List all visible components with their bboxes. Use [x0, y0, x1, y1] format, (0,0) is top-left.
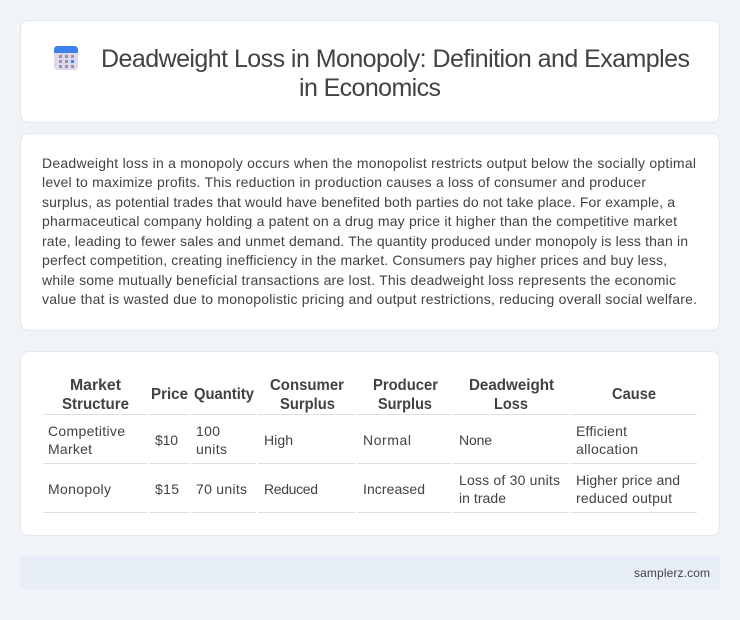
description panel: [20, 134, 720, 330]
row: competitive market: $10: [155, 432, 178, 448]
row: monopoly: Increased: [363, 481, 425, 497]
row: competitive market: High: [264, 432, 293, 448]
description text: value that is wasted due to monopolistic pricing and output restrictions, reducing overall social welfare.: [42, 291, 697, 307]
description text: level to maximize profits. This reduction in production causes a loss of consumer and producer: [42, 174, 646, 190]
description text: perfect competition, creating inefficiency in the market. Consumers pay higher prices and buy less,: [42, 252, 667, 268]
row: competitive market: None: [459, 432, 492, 448]
title: [101, 45, 690, 102]
row: competitive market: units: [196, 441, 227, 457]
table header: Structure: [62, 396, 129, 413]
footer bar: [20, 556, 720, 590]
footer text: samplerz.com: [634, 566, 710, 580]
row: monopoly: 70 units: [196, 481, 247, 497]
description text: rate, leading to fewer sales and unmet demand. The quantity produced under monopoly is less than in: [42, 233, 688, 249]
row: monopoly: Higher price and: [576, 472, 680, 488]
table header: Quantity: [194, 386, 254, 403]
title: Deadweight Loss in Monopoly: Definition and Examples: [101, 45, 690, 73]
table header: Cause: [612, 386, 656, 403]
description text: [41, 155, 697, 307]
row: competitive market: Competitive: [48, 423, 125, 439]
row: competitive market: Efficient: [576, 423, 627, 439]
description text: Deadweight loss in a monopoly occurs when the monopolist restricts output below the socially optimal: [42, 155, 696, 171]
row: monopoly: $15: [155, 481, 179, 497]
row: competitive market: allocation: [576, 441, 638, 457]
table header: Deadweight: [469, 377, 555, 394]
header panel: [20, 20, 720, 122]
table header: Price: [151, 386, 188, 403]
row: monopoly: in trade: [459, 490, 506, 506]
row: monopoly: [48, 472, 680, 506]
row: monopoly: Reduced: [264, 481, 318, 497]
title: in Economics: [299, 74, 441, 102]
table header: Market: [70, 377, 122, 394]
description text: pharmaceutical company holding a patent on a drug may price it higher than the competitive market: [42, 213, 677, 229]
icon: calendar: [54, 46, 78, 70]
row: monopoly: Loss of 30 units: [459, 472, 560, 488]
table header: Producer: [373, 377, 438, 394]
table header: Surplus: [378, 396, 432, 413]
row: competitive market: [48, 423, 638, 457]
description text: while some mutually beneficial transactions are lost. This deadweight loss represents the economic: [41, 272, 676, 288]
row: competitive market: Market: [48, 441, 92, 457]
table rules: [43, 414, 697, 512]
row: monopoly: reduced output: [576, 490, 672, 506]
table header: Consumer: [270, 377, 344, 394]
row: competitive market: Normal: [363, 432, 411, 448]
description text: surplus, as potential trades that would have benefited both parties do not take place. For example, a: [42, 194, 675, 210]
table panel: [20, 352, 720, 536]
row: monopoly: Monopoly: [48, 481, 111, 497]
table header: Loss: [494, 396, 528, 413]
table header: [62, 377, 656, 413]
row: competitive market: 100: [196, 423, 220, 439]
table header: Surplus: [280, 396, 335, 413]
